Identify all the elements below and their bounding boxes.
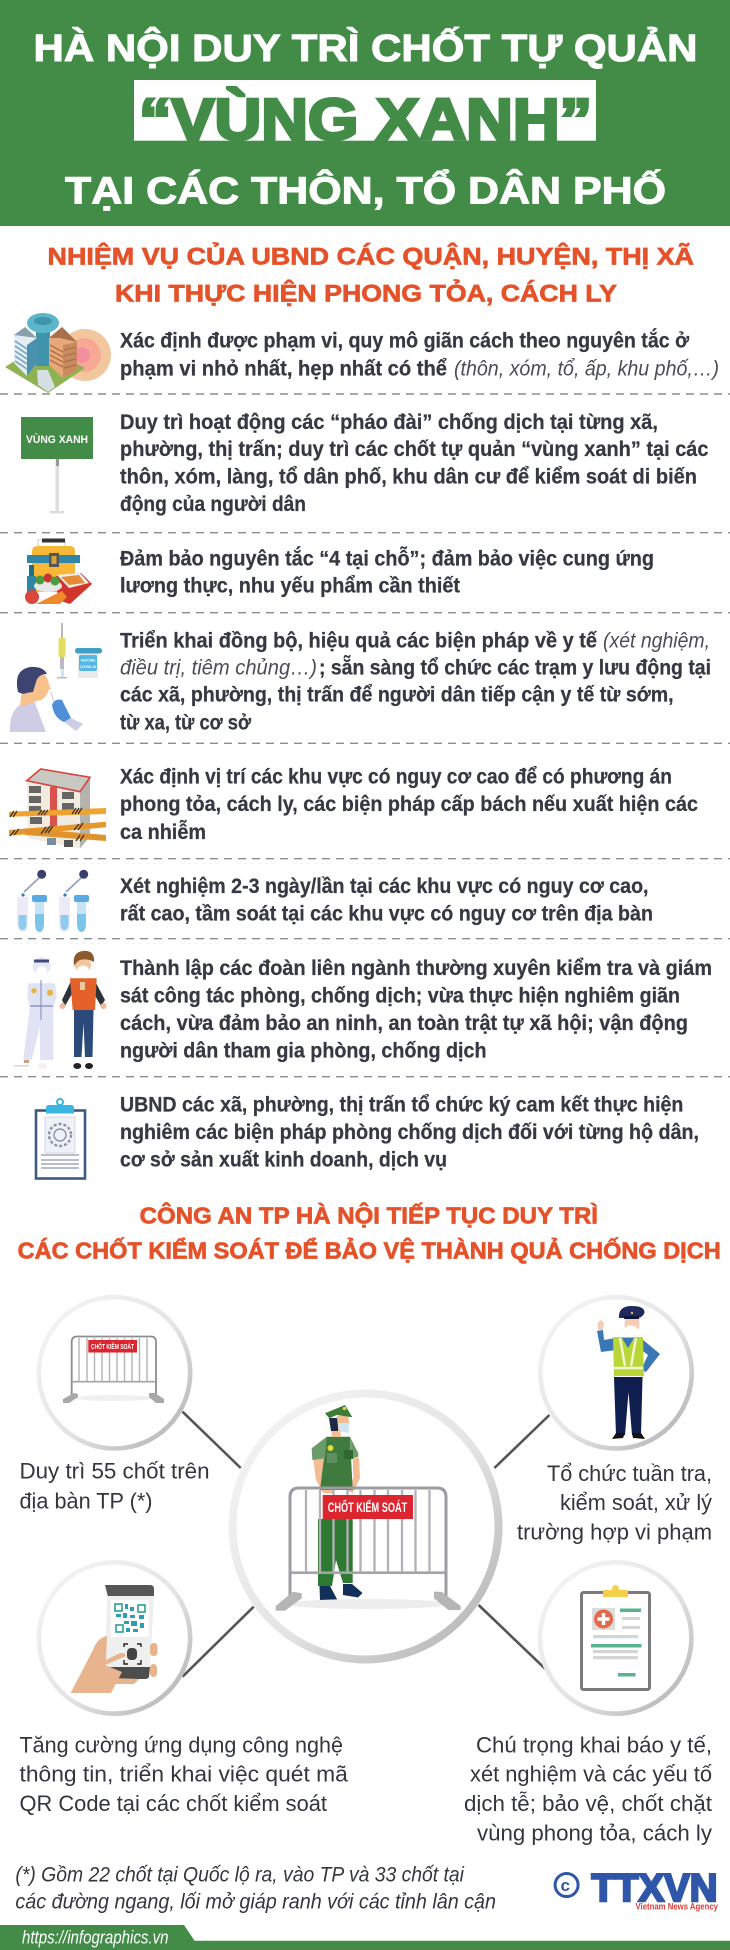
soldier [312, 1405, 362, 1602]
icon: green zone sign: VÙNG XANH [26, 433, 88, 446]
caption: bottom-right: dịch tễ; bảo vệ, chốt chặt [464, 1791, 713, 1816]
text block 3: lương thực, nhu yếu phẩm cần thiết [120, 575, 460, 598]
icon: buildings with risk zone [5, 313, 111, 393]
section heading: nhiệm vụ: NHIỆM VỤ CỦA UBND CÁC QUẬN, HUYỆN, THỊ XÃ [48, 241, 694, 270]
icon: inspection team [14, 951, 106, 1069]
icon: cooler with food [25, 538, 92, 604]
section heading: công an: CÁC CHỐT KIỂM SOÁT ĐỂ BẢO VỆ THÀNH QUẢ CHỐNG DỊCH [18, 1235, 721, 1263]
section heading: công an [18, 1201, 721, 1263]
text block 8: cơ sở sản xuất kinh doanh, dịch vụ [120, 1149, 447, 1172]
text block 2: thôn, xóm, làng, tổ dân phố, khu dân cư để kiểm soát di biến [120, 465, 697, 488]
header banner [0, 0, 730, 226]
text block 4: (xét nghiệm, [603, 630, 710, 653]
circle top-right: traffic officer [540, 1297, 692, 1449]
footer ribbon [0, 1925, 730, 1950]
caption: bottom-left: Tăng cường ứng dụng công nghệ [20, 1733, 343, 1758]
circle bottom-right: medical form [540, 1562, 691, 1714]
text block 4: từ xa, từ cơ sở [120, 711, 251, 734]
central circle: soldier at checkpoint [232, 1394, 498, 1660]
text block 4: Triển khai đồng bộ, hiệu quả các biện pháp về y tế [120, 630, 597, 653]
item 5 [9, 765, 698, 848]
section heading: công an: CÔNG AN TP HÀ NỘI TIẾP TỤC DUY TRÌ [140, 1201, 598, 1228]
caption: top-right: kiểm soát, xử lý [560, 1490, 713, 1515]
caption: bottom-right [464, 1733, 713, 1846]
footer url: https://infographics.vn [22, 1927, 168, 1947]
icon: green zone sign [21, 417, 93, 514]
footnote: (*) Gồm 22 chốt tại Quốc lộ ra, vào TP và 33 chốt tại [15, 1864, 465, 1887]
text block 1: phạm vi nhỏ nhất, hẹp nhất có thể [120, 358, 447, 381]
caption: top-right: Tổ chức tuần tra, [547, 1461, 712, 1486]
text block 2: động của người dân [120, 493, 306, 516]
caption: top-right: trường hợp vi phạm [517, 1519, 712, 1544]
text block 2 [120, 411, 709, 516]
text block 6: rất cao, tầm soát tại các khu vực có nguy cơ trên địa bàn [120, 903, 653, 926]
title highlight: vùng xanh: “VÙNG XANH” [139, 88, 592, 153]
icon: clipboard with gear [36, 1099, 85, 1178]
text block 5: phong tỏa, cách ly, các biện pháp cấp bách nếu xuất hiện các [120, 793, 698, 816]
caption: top-right [517, 1461, 713, 1544]
icon: test tubes [17, 870, 89, 932]
text block 5 [120, 765, 698, 844]
text block 2: phường, thị trấn; duy trì các chốt tự quản “vùng xanh” tại các [120, 438, 709, 461]
circle top-left: barrier [39, 1297, 190, 1449]
caption: top-left: địa bàn TP (*) [20, 1488, 152, 1513]
text block 5: Xác định vị trí các khu vực có nguy cơ cao để có phương án [120, 765, 672, 788]
caption: bottom-right: xét nghiệm và các yếu tố [470, 1762, 712, 1787]
circle bottom-left: QR phone [39, 1562, 190, 1714]
logo: TTXVN: TTXVN [592, 1867, 718, 1910]
sign: chốt kiểm soát [323, 1495, 413, 1519]
text block 7: sát công tác phòng, chống dịch; vừa thực hiện nghiêm giãn [120, 984, 680, 1007]
section heading: nhiệm vụ [48, 241, 694, 308]
text block 2: Duy trì hoạt động các “pháo đài” chống dịch tại từng xã, [120, 411, 658, 434]
caption: bottom-left: QR Code tại các chốt kiểm soát [20, 1791, 328, 1816]
section heading: nhiệm vụ: KHI THỰC HIỆN PHONG TỎA, CÁCH LY [115, 279, 617, 308]
item 4 [10, 623, 711, 734]
text block 4: ; sẵn sàng tổ chức các trạm y lưu động tại [319, 656, 711, 680]
text block 7: cách, vừa đảm bảo an ninh, an toàn trật tự xã hội; vận động [120, 1012, 688, 1035]
caption: top-left: Duy trì 55 chốt trên [20, 1458, 210, 1483]
caption: bottom-right: vùng phong tỏa, cách ly [477, 1821, 713, 1846]
sign: chốt kiểm soát small: CHỐT KIỂM SOÁT [91, 1341, 135, 1351]
text block 7: Thành lập các đoàn liên ngành thường xuyên kiểm tra và giám [120, 957, 712, 980]
text block 4: các xã, phường, thị trấn để người dân tiếp cận y tế từ sớm, [120, 684, 674, 707]
text block 1 [120, 329, 719, 381]
item 8 [36, 1094, 699, 1178]
title line 1: HÀ NỘI DUY TRÌ CHỐT TỰ QUẢN [34, 25, 697, 70]
icon: nasal swab and vaccine [10, 623, 102, 732]
sign: chốt kiểm soát small [88, 1340, 137, 1352]
item 1 [5, 313, 719, 393]
item 2 [21, 411, 709, 516]
text block 7 [120, 957, 712, 1062]
icon: taped off building [9, 769, 106, 848]
caption: bottom-left [20, 1733, 348, 1816]
text block 6: Xét nghiệm 2-3 ngày/lần tại các khu vực có nguy cơ cao, [120, 875, 648, 898]
item 6 [17, 870, 653, 932]
logo: TTXVN: c [560, 1876, 570, 1895]
text block 1: (thôn, xóm, tổ, ấp, khu phố,…) [454, 358, 719, 381]
caption: bottom-left: thông tin, triển khai việc quét mã [20, 1762, 348, 1787]
item 3 [25, 538, 654, 604]
caption: top-left [20, 1458, 210, 1513]
text block 8: nghiêm các biện pháp phòng chống dịch đối với từng hộ dân, [120, 1121, 699, 1144]
caption: bottom-right: Chú trọng khai báo y tế, [476, 1733, 712, 1758]
text block 3: Đảm bảo nguyên tắc “4 tại chỗ”; đảm bảo việc cung ứng [120, 547, 654, 571]
item 7 [14, 951, 712, 1069]
text block 7: người dân tham gia phòng, chống dịch [120, 1039, 486, 1062]
barrier [276, 1488, 461, 1611]
icon: nasal swab and vaccine: VACCINE [80, 658, 96, 662]
text block 8: UBND các xã, phường, thị trấn tổ chức ký cam kết thực hiện [120, 1094, 683, 1117]
icon: nasal swab and vaccine: COVID-19 [80, 664, 97, 669]
text block 5: ca nhiễm [120, 820, 206, 844]
title line 3: TẠI CÁC THÔN, TỔ DÂN PHỐ [65, 167, 666, 212]
text block 4: điều trị, tiêm chủng…) [120, 657, 317, 680]
text block 8 [120, 1094, 699, 1172]
text block 1: Xác định được phạm vi, quy mô giãn cách theo nguyên tắc ở [120, 329, 689, 353]
text block 6 [120, 875, 653, 926]
footnote [15, 1864, 496, 1913]
text block 4 [120, 630, 711, 734]
sign: chốt kiểm soát: CHỐT KIỂM SOÁT [328, 1498, 407, 1515]
connector lines [182, 1412, 552, 1677]
text block 3 [120, 547, 654, 598]
footnote: các đường ngang, lối mở giáp ranh với các tỉnh lân cận [15, 1890, 496, 1913]
